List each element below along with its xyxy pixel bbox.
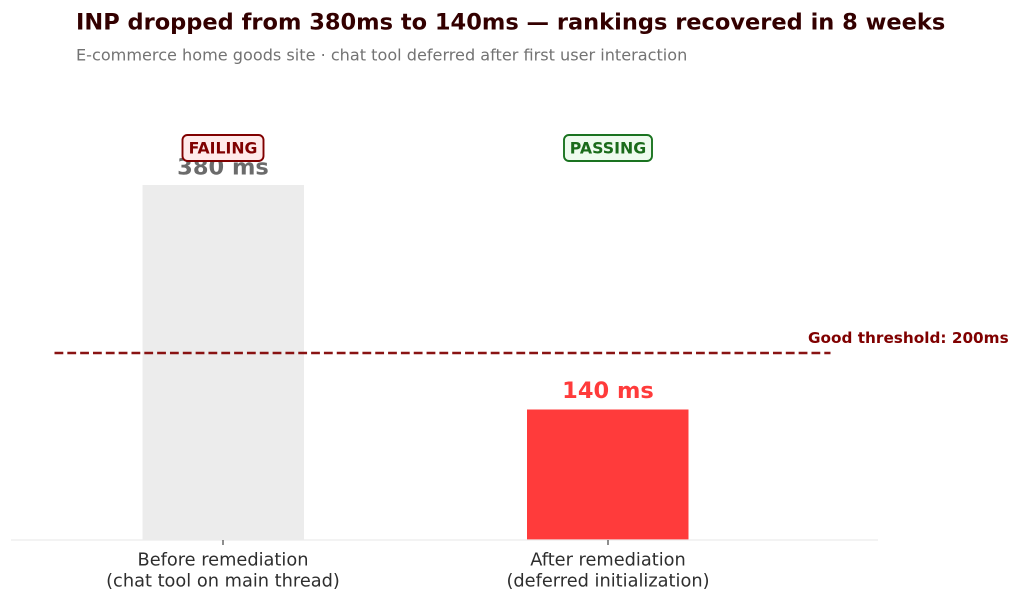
bar: before remediation [142, 185, 304, 540]
x axis label: before [106, 540, 340, 592]
x axis label: after: After remediation [530, 550, 686, 570]
threshold label: Good threshold: 200ms [808, 329, 1009, 347]
x axis label: after [506, 540, 710, 592]
title: INP dropped from 380ms to 140ms — rankings recovered in 8 weeks [76, 10, 945, 36]
x axis label: before: Before remediation [138, 550, 308, 570]
value label: 380 ms: 380 ms [177, 154, 269, 180]
subtitle: E-commerce home goods site · chat tool deferred after first user interaction [76, 46, 687, 64]
badge: passing [564, 135, 652, 161]
threshold line [54, 352, 830, 354]
x axis label: after: (deferred initialization) [506, 572, 710, 592]
badge: failing: FAILING [189, 138, 257, 158]
badge: failing [182, 135, 264, 161]
bar chart [11, 135, 1009, 592]
badge: passing: PASSING [570, 138, 646, 158]
bar: after remediation [527, 410, 688, 540]
baseline axis [11, 539, 878, 541]
x axis label: before: (chat tool on main thread) [106, 572, 340, 592]
value label: 140 ms: 140 ms [562, 378, 654, 404]
